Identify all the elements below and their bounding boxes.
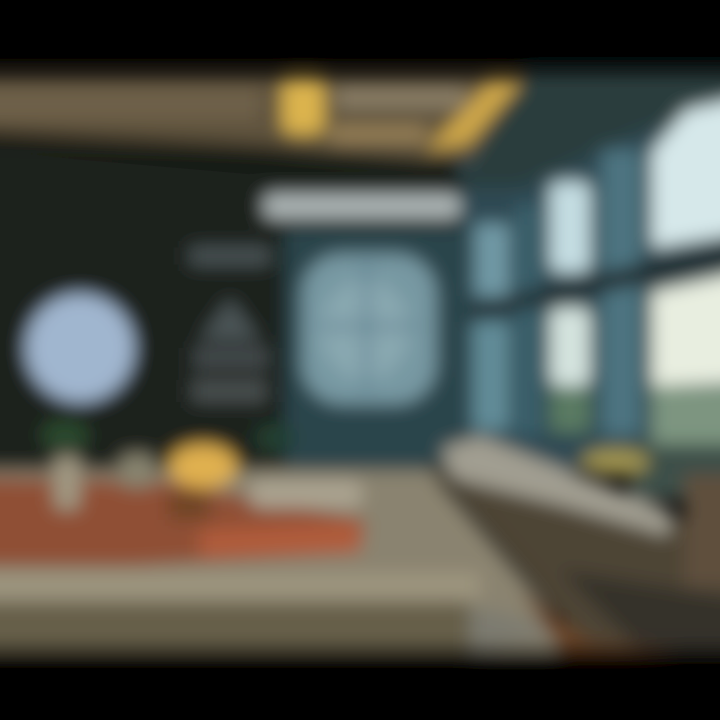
icon: round wall disc — [26, 294, 134, 402]
window columns — [470, 150, 720, 435]
rug — [0, 478, 365, 566]
panel: central blue round panel — [302, 254, 436, 404]
icon: ceiling lights — [282, 80, 522, 150]
windows — [470, 96, 720, 444]
plants and vase — [41, 420, 295, 510]
sofa — [428, 436, 720, 650]
back wall — [0, 120, 720, 500]
panel: bright heading strip — [264, 194, 460, 218]
cushion — [581, 448, 649, 476]
table lamp — [168, 444, 237, 520]
ceiling — [0, 72, 720, 188]
window panes — [473, 96, 720, 444]
panel: grey text column — [190, 247, 270, 402]
floor — [0, 470, 585, 650]
